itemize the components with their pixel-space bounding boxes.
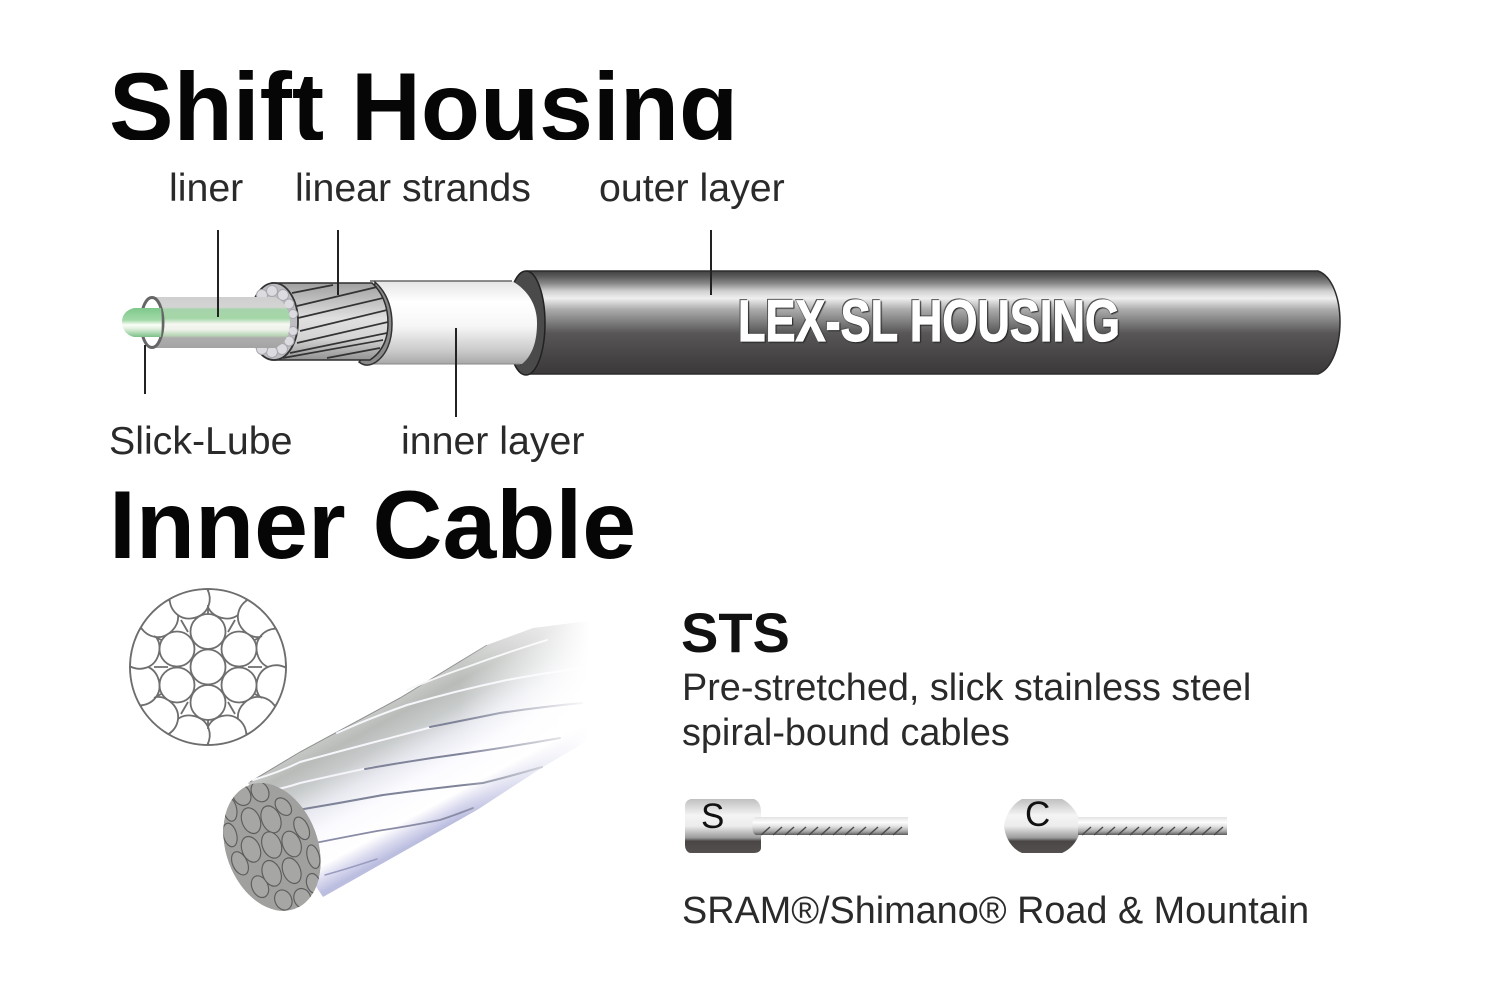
inner layer [359,281,537,365]
label: Slick-Lube: Slick-Lube [109,419,292,463]
icon: cable cross-section [128,587,288,747]
title: Inner Cable: Inner Cable [109,470,636,579]
LEX-SL HOUSING lettering: LEX-SL HOUSING [738,289,1120,354]
title: Shift Housing: Shift Housing [109,52,738,161]
liner tube [141,297,290,348]
label: outer layer: outer layer [599,166,785,210]
icon: S cable end [685,797,908,853]
outer layer [507,271,1340,375]
callout lines [145,230,711,417]
Slick-Lube core [122,308,162,337]
icon: S cable end: S [701,797,724,836]
compatibility note: SRAM®/Shimano® Road & Mountain [682,890,1309,932]
description text: spiral-bound cables [682,712,1010,754]
diagram: housing cross-layers [122,271,1340,375]
cable end face [223,783,321,911]
description text: Pre-stretched, slick stainless steel [682,667,1251,709]
icon: C cable end [1004,795,1227,853]
linear strands [250,283,388,360]
heading: STS: STS [681,601,790,664]
illustration: twisted steel cable [223,623,582,911]
label: liner: liner [169,166,243,210]
label: inner layer: inner layer [401,419,584,463]
icon: C cable end: C [1025,795,1050,834]
label: linear strands: linear strands [295,166,531,210]
description text [682,667,1251,754]
